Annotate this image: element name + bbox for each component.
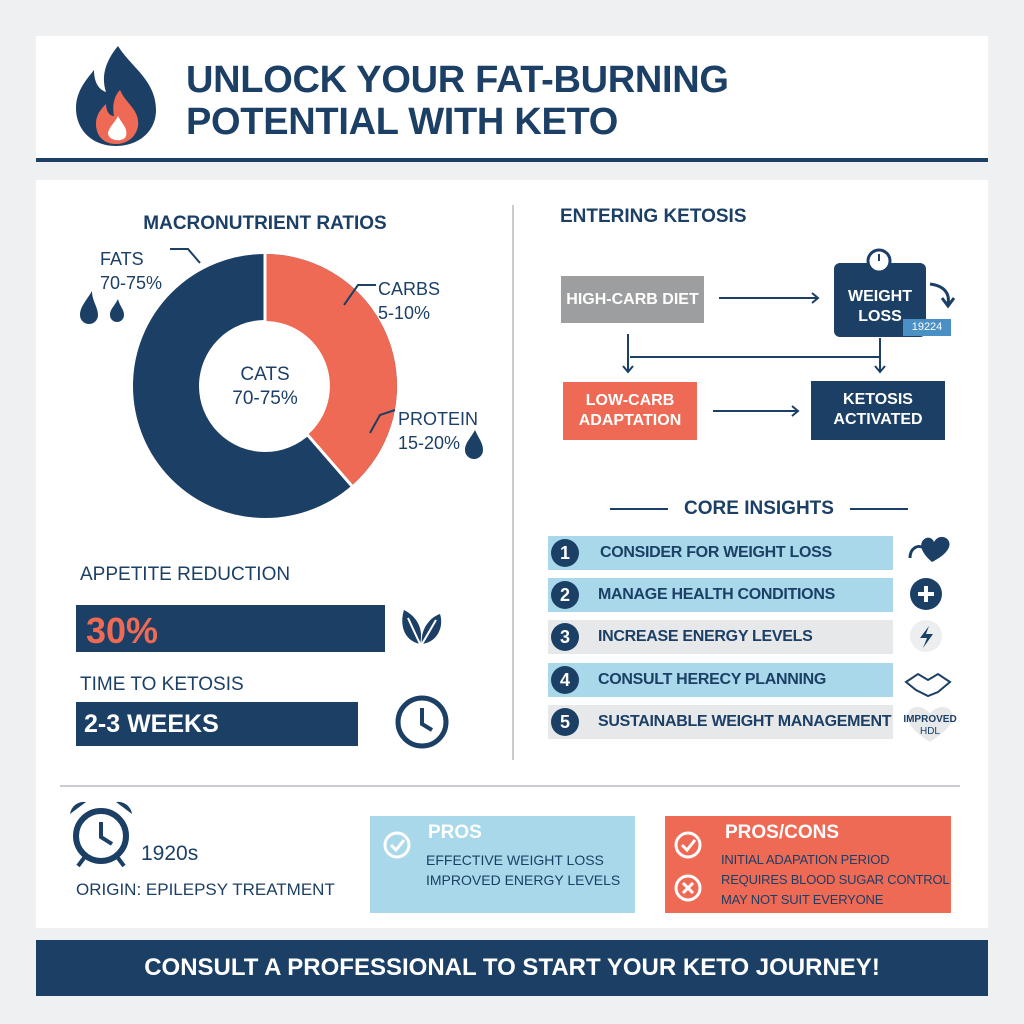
origin block: 1920s bbox=[141, 842, 198, 865]
panel: entering ketosis flow: 19224 bbox=[912, 321, 942, 333]
box: low-carb adaptation: ADAPTATION bbox=[579, 412, 681, 429]
row 2: 2 bbox=[560, 585, 570, 605]
box: low-carb adaptation: LOW-CARB bbox=[586, 392, 674, 409]
label: carbs bbox=[378, 279, 440, 323]
label: center: CATS bbox=[240, 364, 290, 385]
icon: flame bbox=[76, 46, 156, 146]
box: high-carb diet: HIGH-CARB DIET bbox=[566, 291, 699, 308]
row 2 bbox=[548, 578, 893, 612]
stat: appetite reduction: APPETITE REDUCTION bbox=[80, 564, 290, 585]
header panel bbox=[36, 36, 988, 162]
box: weight loss bbox=[834, 263, 926, 337]
panel: macronutrient ratios bbox=[80, 213, 483, 518]
origin block bbox=[70, 802, 335, 899]
box: ketosis activated: KETOSIS bbox=[843, 391, 913, 408]
heading: MACRONUTRIENT RATIOS bbox=[143, 213, 387, 234]
row 1: CONSIDER FOR WEIGHT LOSS bbox=[600, 544, 832, 561]
box: weight loss: WEIGHT bbox=[848, 288, 912, 305]
main panel bbox=[36, 180, 988, 928]
icon: alarm clock bbox=[70, 802, 132, 868]
stat: appetite reduction: 30% bbox=[86, 610, 158, 651]
stat: time to ketosis bbox=[76, 674, 448, 748]
insight icons: HDL bbox=[920, 726, 940, 737]
stat: time to ketosis: TIME TO KETOSIS bbox=[80, 674, 244, 695]
row 5: SUSTAINABLE WEIGHT MANAGEMENT bbox=[598, 713, 891, 730]
pros box: IMPROVED ENERGY LEVELS bbox=[426, 872, 620, 888]
label: carbs: 5-10% bbox=[378, 303, 430, 323]
panel: core insights: CORE INSIGHTS bbox=[684, 498, 834, 519]
label: center: 70-75% bbox=[232, 388, 298, 409]
label: center bbox=[232, 364, 298, 409]
pros/cons box: MAY NOT SUIT EVERYONE bbox=[721, 892, 883, 907]
pros/cons box: PROS/CONS bbox=[725, 822, 839, 843]
pros box: EFFECTIVE WEIGHT LOSS bbox=[426, 852, 604, 868]
footer banner: CONSULT A PROFESSIONAL TO START YOUR KETO JOURNEY! bbox=[144, 954, 880, 981]
pros/cons box: INITIAL ADAPATION PERIOD bbox=[721, 852, 889, 867]
row 1 bbox=[548, 536, 893, 570]
heading bbox=[610, 508, 668, 510]
label: fats: 70-75% bbox=[100, 273, 162, 293]
box: ketosis activated bbox=[811, 381, 945, 440]
box: high-carb diet bbox=[561, 276, 704, 323]
panel: entering ketosis flow bbox=[560, 206, 956, 440]
pros box: PROS bbox=[428, 822, 482, 843]
title bbox=[186, 59, 729, 143]
pros/cons box: REQUIRES BLOOD SUGAR CONTROL bbox=[721, 872, 949, 887]
row 3: INCREASE ENERGY LEVELS bbox=[598, 628, 812, 645]
donut chart bbox=[80, 248, 483, 518]
pros box bbox=[370, 816, 635, 913]
title: POTENTIAL WITH KETO bbox=[186, 101, 618, 143]
pros/cons box bbox=[665, 816, 951, 913]
stat: appetite reduction bbox=[76, 564, 442, 652]
footer banner bbox=[36, 940, 988, 996]
label: fats: FATS bbox=[100, 249, 144, 269]
row 5 bbox=[548, 705, 893, 739]
insight icons bbox=[903, 536, 957, 742]
row 1: 1 bbox=[560, 543, 570, 563]
label: protein: 15-20% bbox=[398, 433, 460, 453]
box: ketosis activated: ACTIVATED bbox=[833, 411, 923, 428]
row 3 bbox=[548, 620, 893, 654]
box: weight loss: LOSS bbox=[858, 308, 902, 325]
title: UNLOCK YOUR FAT-BURNING bbox=[186, 59, 729, 101]
row 5: 5 bbox=[560, 712, 570, 732]
insight icons: IMPROVED bbox=[903, 714, 957, 725]
box: low-carb adaptation bbox=[563, 382, 697, 440]
label: protein: PROTEIN bbox=[398, 409, 478, 429]
label: carbs: CARBS bbox=[378, 279, 440, 299]
row 4: 4 bbox=[560, 670, 570, 690]
icon: clock bbox=[396, 696, 448, 748]
label: fats bbox=[100, 249, 162, 293]
origin block: ORIGIN: EPILEPSY TREATMENT bbox=[76, 880, 335, 899]
arrows bbox=[622, 282, 956, 417]
row 4 bbox=[548, 663, 893, 697]
icon: leaves bbox=[402, 610, 442, 644]
row 2: MANAGE HEALTH CONDITIONS bbox=[598, 586, 835, 603]
label: protein bbox=[398, 409, 478, 453]
heading: ENTERING KETOSIS bbox=[560, 206, 747, 227]
row 3: 3 bbox=[560, 627, 570, 647]
stat: time to ketosis: 2-3 WEEKS bbox=[84, 710, 219, 738]
row 4: CONSULT HERECY PLANNING bbox=[598, 671, 826, 688]
